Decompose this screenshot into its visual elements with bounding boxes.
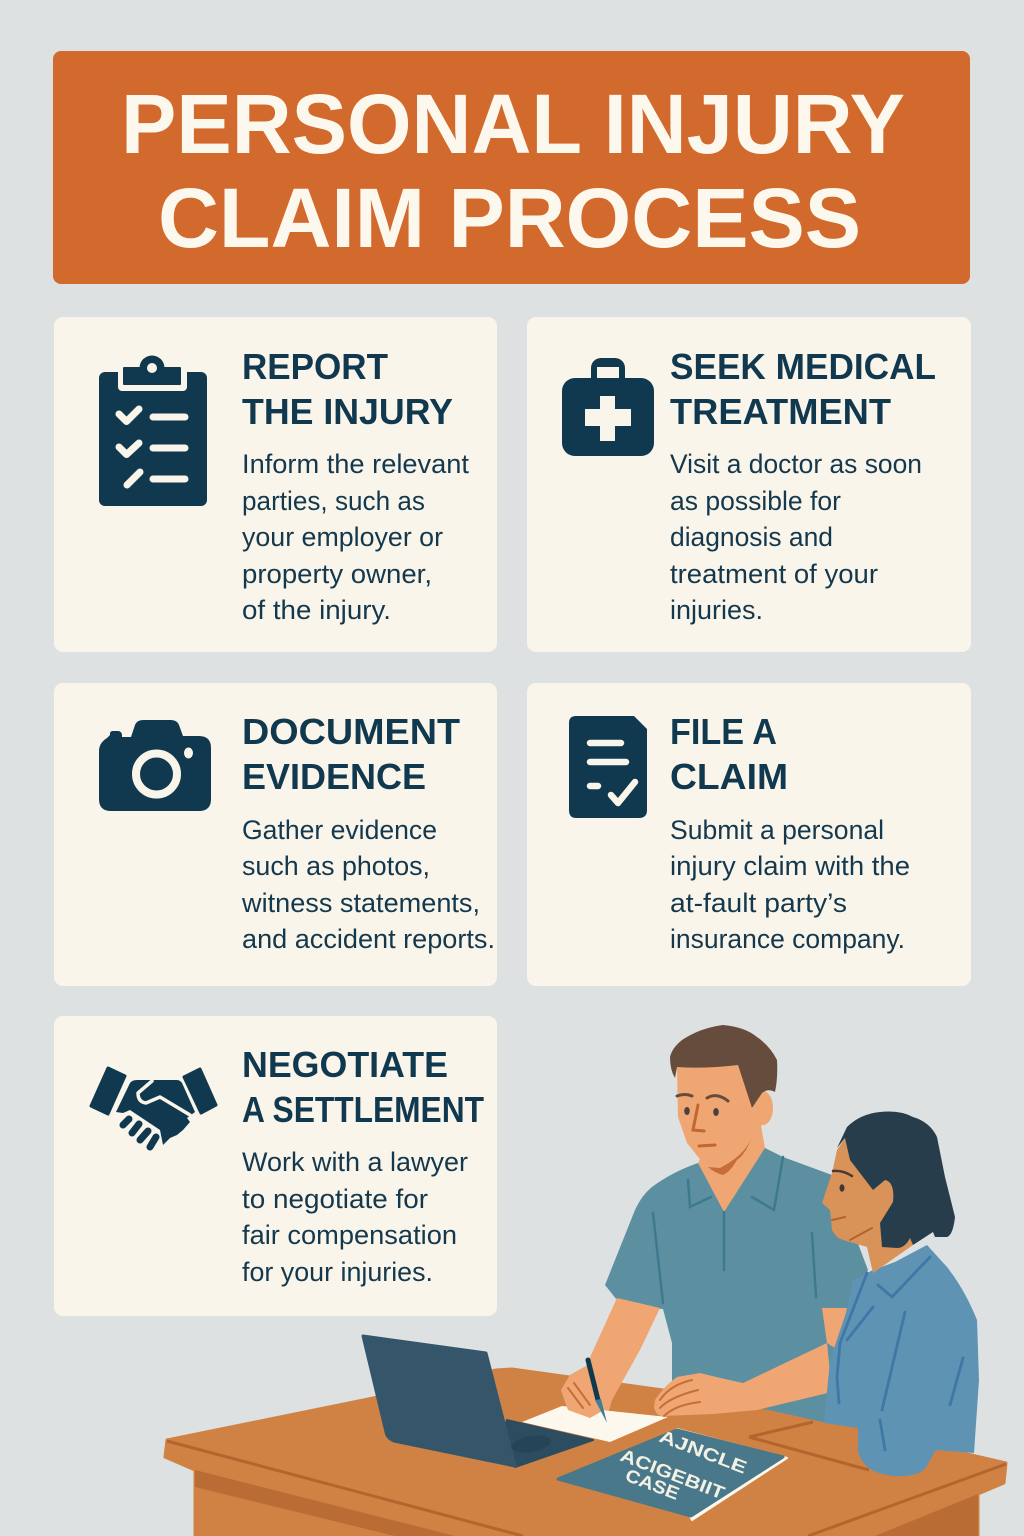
heading bbox=[242, 1044, 484, 1130]
heading: TREATMENT bbox=[670, 391, 891, 432]
man bbox=[561, 1025, 868, 1423]
book cover text: ACIGEBIIT bbox=[618, 1445, 727, 1503]
body text bbox=[670, 815, 910, 954]
desk bbox=[165, 1369, 1006, 1536]
body text: witness statements, bbox=[241, 888, 480, 918]
body text bbox=[242, 1147, 468, 1287]
body text: insurance company. bbox=[670, 924, 905, 954]
body text: to negotiate for bbox=[242, 1184, 428, 1214]
heading: DOCUMENT bbox=[242, 711, 460, 752]
body text bbox=[670, 449, 922, 625]
writing hand with pen bbox=[561, 1360, 700, 1423]
body text bbox=[242, 449, 470, 625]
laptop bbox=[363, 1336, 593, 1467]
body text: property owner, bbox=[242, 559, 432, 589]
book cover text: AJNCLE bbox=[657, 1426, 750, 1478]
body text: Visit a doctor as soon bbox=[670, 449, 922, 479]
blouse bbox=[824, 1245, 979, 1476]
upper left arm behind client bbox=[822, 1308, 847, 1350]
heading: CLAIM bbox=[670, 756, 788, 797]
panel: file a claim bbox=[527, 683, 971, 986]
woman bbox=[822, 1112, 979, 1476]
shirt folds bbox=[653, 1157, 816, 1303]
title bbox=[121, 77, 905, 265]
body text: fair compensation bbox=[242, 1220, 457, 1250]
hair bbox=[837, 1112, 955, 1248]
left forearm and hand bbox=[654, 1343, 832, 1416]
jaw shadow bbox=[708, 1137, 752, 1175]
neck and face bbox=[822, 1138, 913, 1273]
panel: report the injury bbox=[54, 317, 497, 652]
icon: handshake bbox=[91, 1068, 216, 1147]
icon: clipboard checklist bbox=[99, 356, 207, 506]
book: case file bbox=[558, 1426, 787, 1520]
title: CLAIM PROCESS bbox=[158, 171, 861, 265]
body text: at-fault party’s bbox=[670, 888, 847, 918]
book cover text: CASE bbox=[623, 1465, 682, 1504]
body text: injury claim with the bbox=[670, 851, 910, 881]
hair bbox=[670, 1025, 777, 1108]
neck bbox=[698, 1120, 765, 1212]
body text: Inform the relevant bbox=[242, 449, 470, 479]
body text: diagnosis and bbox=[670, 522, 833, 552]
shirt bbox=[605, 1148, 868, 1423]
heading bbox=[670, 346, 936, 432]
ear bbox=[874, 1178, 896, 1212]
facial features bbox=[677, 1094, 728, 1101]
body text: Work with a lawyer bbox=[242, 1147, 468, 1177]
heading: A SETTLEMENT bbox=[242, 1089, 484, 1130]
title: PERSONAL INJURY bbox=[121, 77, 905, 171]
body text: of the injury. bbox=[242, 595, 391, 625]
face bbox=[677, 1065, 762, 1168]
heading: THE INJURY bbox=[242, 391, 453, 432]
body text bbox=[241, 815, 495, 954]
body text: as possible for bbox=[670, 486, 841, 516]
ear bbox=[753, 1091, 773, 1125]
facial features bbox=[833, 1171, 852, 1176]
body text: treatment of your bbox=[670, 559, 878, 589]
heading bbox=[242, 711, 460, 797]
body text: injuries. bbox=[670, 595, 763, 625]
body text: parties, such as bbox=[242, 486, 425, 516]
icon: camera bbox=[99, 720, 211, 811]
heading: NEGOTIATE bbox=[242, 1044, 448, 1085]
body text: Submit a personal bbox=[670, 815, 884, 845]
icon: claim document bbox=[569, 716, 647, 818]
blouse folds bbox=[837, 1257, 963, 1450]
panel: negotiate a settlement bbox=[54, 1016, 497, 1316]
book cover text bbox=[618, 1426, 750, 1504]
icon: medical bag bbox=[562, 358, 654, 456]
panel: document evidence bbox=[54, 683, 497, 986]
heading bbox=[670, 711, 788, 797]
heading: REPORT bbox=[242, 346, 388, 387]
body text: and accident reports. bbox=[242, 924, 495, 954]
body text: such as photos, bbox=[242, 851, 430, 881]
body text: your employer or bbox=[242, 522, 443, 552]
body text: for your injuries. bbox=[242, 1257, 433, 1287]
right arm bbox=[561, 1298, 660, 1418]
illustration: lawyer and client at desk bbox=[165, 1025, 1006, 1536]
body text: Gather evidence bbox=[242, 815, 437, 845]
paper on desk bbox=[522, 1406, 668, 1442]
heading: SEEK MEDICAL bbox=[670, 346, 936, 387]
heading: FILE A bbox=[670, 711, 777, 752]
heading: EVIDENCE bbox=[242, 756, 426, 797]
heading bbox=[242, 346, 453, 432]
title banner bbox=[53, 51, 970, 284]
panel: seek medical treatment bbox=[527, 317, 971, 652]
